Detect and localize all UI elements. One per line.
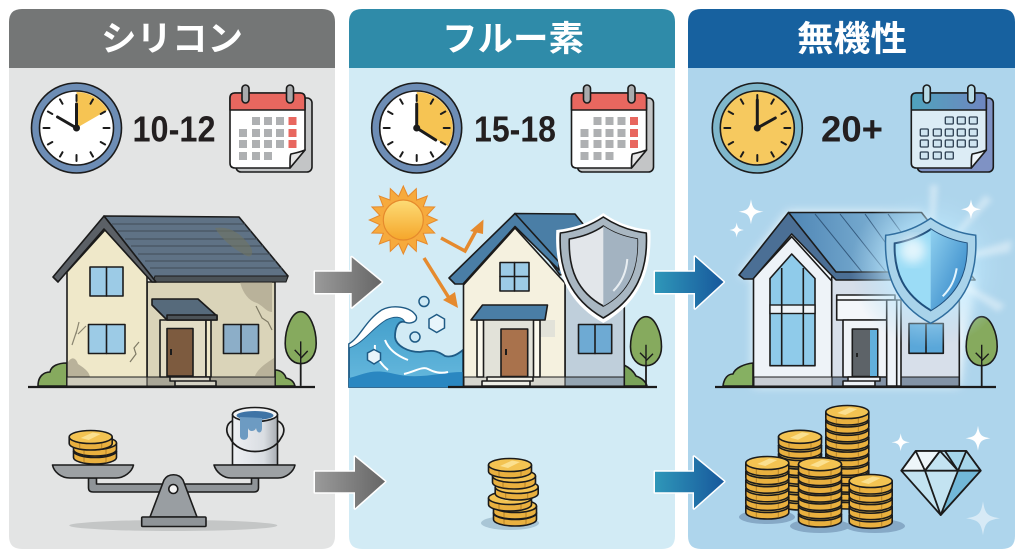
years: inorganic: 20+ [821,108,883,150]
icon: calendar fluorine [572,85,654,172]
ground line: inorganic [715,386,996,388]
header: fluorine: フルー素 [442,20,584,59]
scale shadow [69,520,277,531]
porch [160,320,206,377]
stack E [849,474,892,528]
house glow: inorganic [739,212,975,386]
arrow: incoming ray [424,258,458,308]
scale beam [88,478,258,492]
stack A [826,406,869,509]
coins on left pan [69,430,116,464]
roof edge [739,212,905,280]
house: worn silicone house [38,216,316,386]
right wall [832,277,959,386]
walls [147,282,275,386]
stack B [778,430,822,510]
icon: fluorine shield [556,213,651,323]
house: fluorine house [449,214,662,387]
sparkle: upper left small [729,222,744,238]
right pan [214,465,295,478]
gable wall [464,228,565,386]
roof [515,214,612,275]
porch roof [152,299,217,320]
left wall [754,237,832,386]
header: fluorine [349,9,675,68]
windows [88,267,258,354]
icon: inorganic shield [885,218,976,323]
left pan [52,465,134,478]
sparkle: diamond faint [966,501,1000,535]
shield glow [850,185,1012,348]
panel: fluorine [349,9,675,549]
header: silicone [9,9,335,68]
bush [624,365,647,386]
side window [909,324,943,353]
bushes [38,363,67,386]
sparkle: upper right [961,199,981,219]
illustration: fluorine sun [369,186,437,254]
header: silicone: シリコン [101,20,243,59]
roof [788,212,975,280]
icon: calendar inorganic [911,85,993,172]
stack D [798,458,842,527]
paint can [227,408,284,465]
tree [285,312,316,386]
bush [723,363,753,386]
arrow: silicone to fluorine top [315,257,382,307]
icon: diamond [901,451,981,515]
icon: clock silicone [32,83,122,173]
tree [966,317,997,387]
arrow: reflected ray [441,220,484,251]
icon: calendar silicone [230,85,312,172]
canopy [837,295,895,320]
panel: inorganic [688,9,1015,549]
gable edge [104,216,288,281]
door [167,328,193,376]
column [887,300,901,386]
sparkle: diamond left [892,433,910,451]
years: fluorine: 15-18 [474,108,556,150]
porch roof [471,305,548,320]
panel: silicone [9,9,335,549]
shadows [739,510,795,524]
porch [483,320,555,377]
ground line: fluorine [448,386,657,388]
icon: clock fluorine [372,83,462,173]
header: inorganic [688,9,1015,68]
sparkle: diamond right [966,426,990,451]
door [501,329,528,376]
header: inorganic: 無機性 [797,20,907,59]
coin stacks: inorganic [739,406,905,533]
tree [630,317,662,387]
arrow: silicone to fluorine bottom [315,457,385,508]
foundation [754,377,832,386]
coin stack: fluorine [481,458,539,530]
illustration: wave [349,296,463,387]
years: silicone: 10-12 [132,108,216,150]
balance scale with coins and paint can [52,408,295,531]
pivot [150,475,197,517]
foundation [464,377,565,386]
arrow: fluorine to inorganic bottom [655,457,724,508]
ground line: silicone [28,386,315,388]
house: inorganic house [723,212,997,387]
windows [500,262,529,291]
gable edge [449,214,559,284]
icon: clock inorganic [712,83,802,173]
arrow: fluorine to inorganic top [655,257,724,308]
side wall [565,265,624,386]
door [852,329,878,376]
tall window [770,254,815,366]
stains and foundation [68,282,274,386]
stack C [746,456,789,519]
sparkle: upper left large [738,199,764,224]
